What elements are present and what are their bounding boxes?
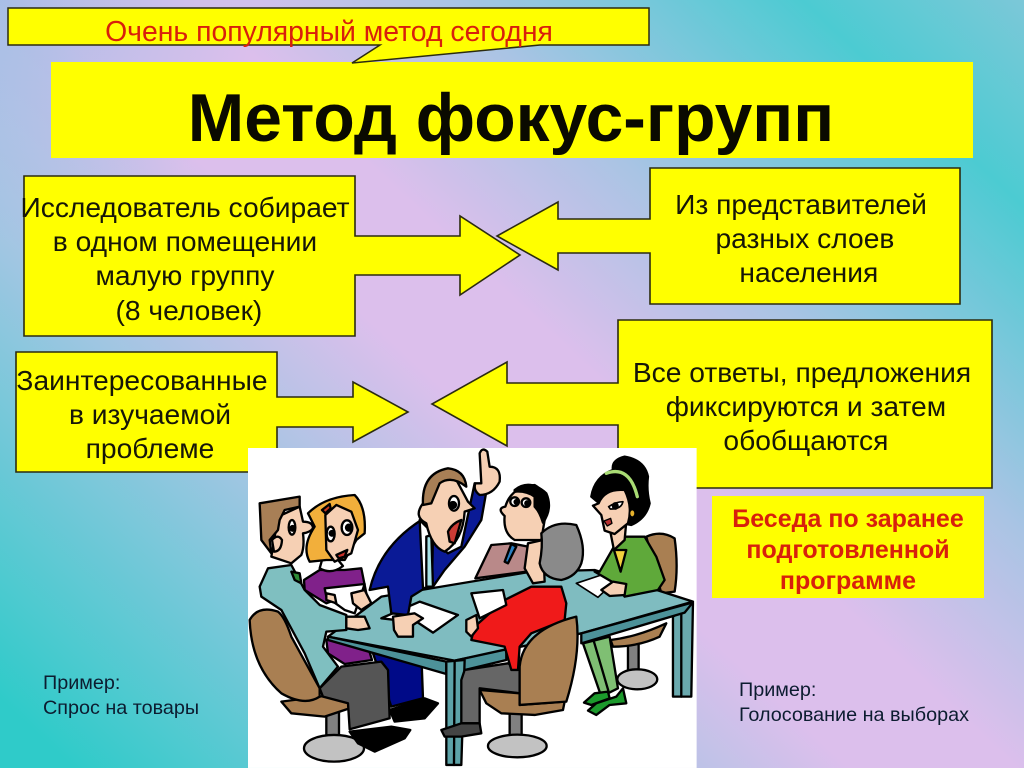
man in back: head [501,485,549,540]
title: Метод фокус-групп [188,81,834,156]
man in teal [260,497,370,688]
note: demand example: Пример: [43,672,120,694]
table [328,570,693,765]
text: answers: Все ответы, предложения [633,356,971,388]
text: representatives: разных слоев [715,222,894,254]
panel: prepared programme [712,496,984,598]
man in back: jacket [475,543,538,578]
text: answers [633,356,971,456]
text: representatives: Из представителей [675,188,927,220]
text: researcher: (8 человек) [115,294,262,326]
left chair seat and base [281,689,368,762]
text: researcher [20,191,350,326]
paper on table centre [381,602,458,633]
note: voting example: Голосование на выборах [739,704,969,726]
note: demand example: Спрос на товары [43,696,199,718]
left chair back [250,610,320,701]
man in blue suit [370,450,500,637]
text: prepared programme: подготовленной [746,536,950,564]
woman in red [466,524,583,670]
text: prepared programme: программе [780,567,916,595]
title panel [51,62,973,158]
note: demand example [43,672,199,718]
woman in red: trousers and shoe [441,663,520,737]
man in teal: trousers and shoe [320,662,410,752]
text: answers: обобщаются [723,424,888,456]
front right chair [480,617,578,757]
paper on table right [576,575,616,597]
text: prepared programme [732,505,964,595]
text: researcher: Исследователь собирает [20,191,350,223]
green woman's legs and shoes [583,637,626,715]
text: answers: фиксируются и затем [666,390,946,422]
text: researcher: малую группу [96,259,274,291]
callout text: Очень популярный метод сегодня [105,16,553,48]
text: interested: в изучаемой [69,398,231,430]
note: voting example [739,679,969,726]
text: representatives [675,188,927,288]
text: prepared programme: Беседа по заранее [732,505,964,533]
text: interested: проблеме [86,432,214,464]
note: voting example: Пример: [739,679,816,701]
text: interested [16,364,268,464]
panel: popular method callout [7,7,650,64]
text: representatives: населения [739,256,878,288]
purple skirt [326,627,372,664]
right woman's chair [611,534,677,689]
text: interested: Заинтересованные [16,364,268,396]
woman in green [591,457,665,597]
blue man's trousers [373,653,438,722]
text: researcher: в одном помещении [53,225,317,257]
woman in purple [304,495,371,613]
